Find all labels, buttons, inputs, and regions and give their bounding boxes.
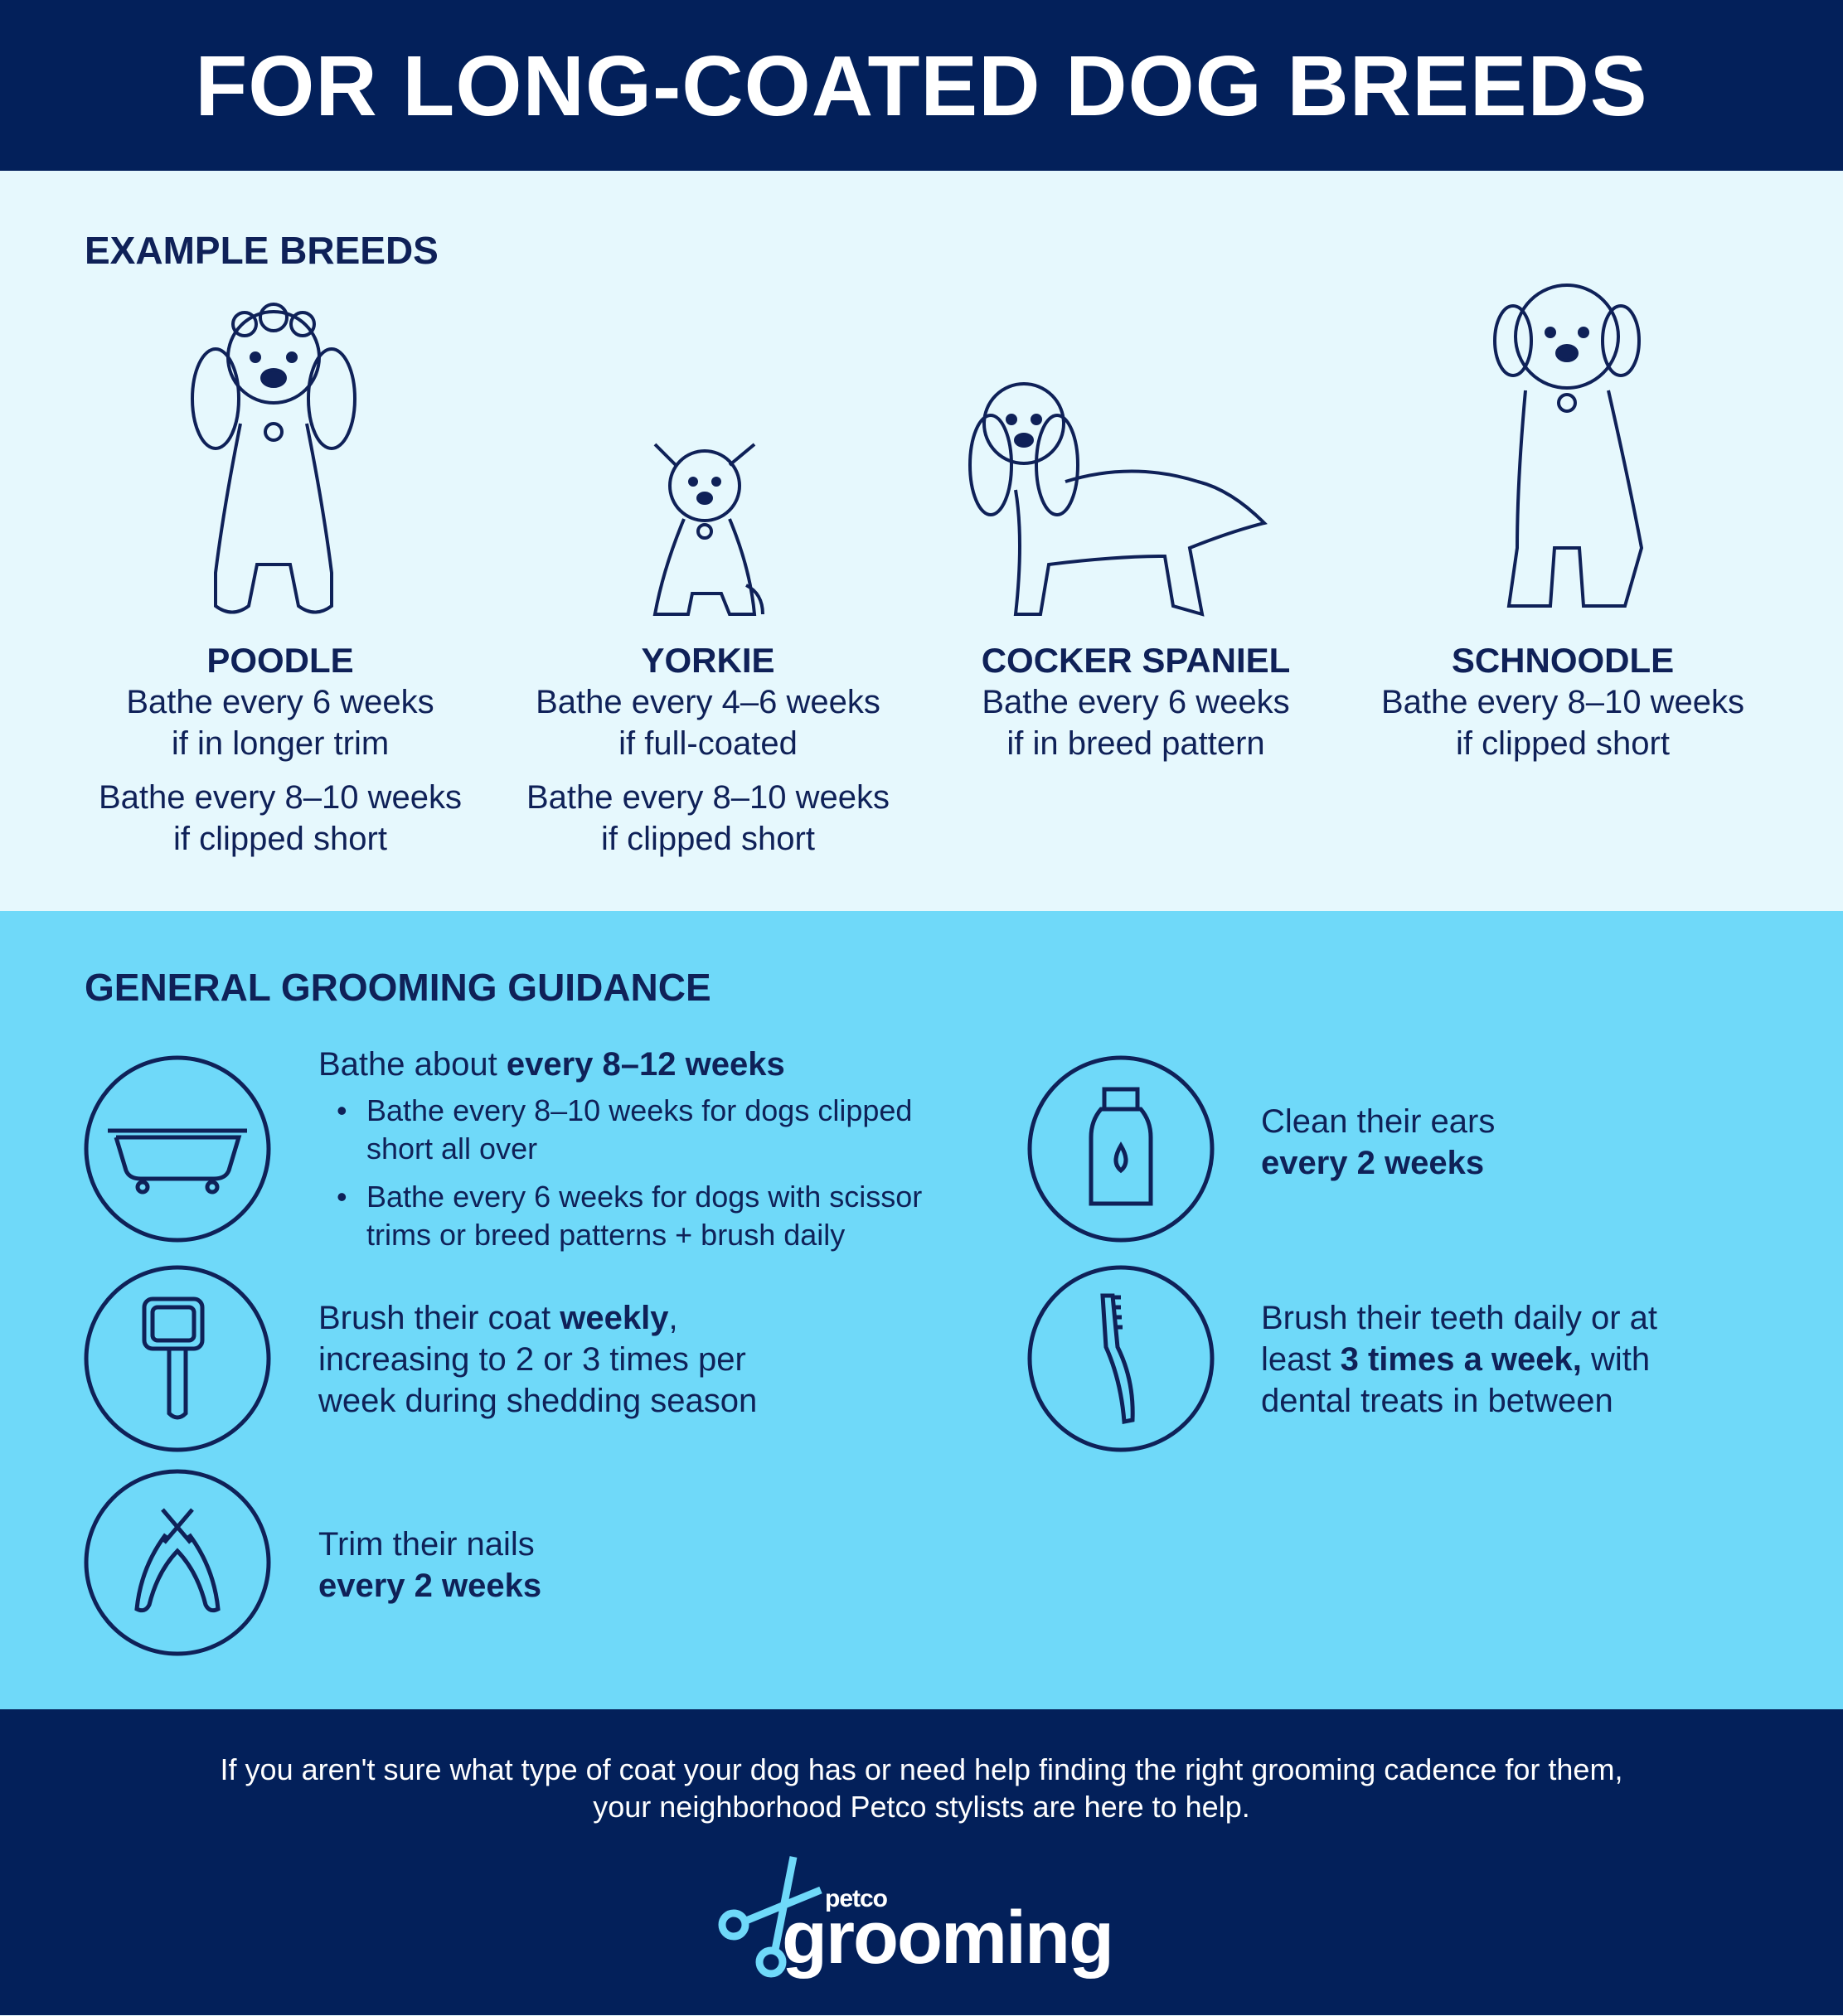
panel: general grooming guidance [0,911,1843,1709]
text: brush coat: increasing to 2 or 3 times per [318,1341,746,1378]
footer text [221,1752,1622,1824]
text: brush coat: Brush their coat weekly, [318,1300,678,1336]
icon: cocker spaniel [968,382,1268,617]
text: ears: Clean their ears [1261,1103,1495,1140]
breed: schnoodle: SCHNOODLE [1452,641,1674,680]
panel: example breeds [0,171,1843,911]
text: teeth [1261,1300,1657,1419]
breed: poodle: if in longer trim [172,725,389,762]
icon: bathtub [85,1056,270,1242]
breed: yorkie: if full-coated [618,725,798,762]
breed: cocker spaniel [982,641,1290,762]
text: brush coat: week during shedding season [318,1383,757,1419]
icon: nail clipper [85,1469,270,1656]
breed: yorkie [526,641,890,857]
breed: poodle: if clipped short [173,821,387,857]
breed: schnoodle: Bathe every 8–10 weeks [1381,684,1744,720]
text: bathe: • [337,1093,347,1127]
text: brush coat [318,1300,757,1419]
icon: toothbrush [1028,1265,1214,1452]
text: teeth: Brush their teeth daily or at [1261,1300,1657,1336]
icon: yorkie [653,443,764,616]
breed: poodle: Bathe every 8–10 weeks [99,779,462,816]
breed: cocker spaniel: if in breed pattern [1006,725,1265,762]
heading: example breeds: EXAMPLE BREEDS [85,229,439,272]
header band [0,0,1843,171]
footer text: If you aren't sure what type of coat your dog has or need help finding the right grooming cadence for them, [221,1752,1622,1786]
breed: schnoodle [1381,641,1744,762]
breed: poodle: POODLE [206,641,354,680]
icon: schnoodle [1493,284,1643,608]
breed: yorkie: YORKIE [641,641,775,680]
breed: cocker spaniel: COCKER SPANIEL [982,641,1290,680]
breed: schnoodle: if clipped short [1456,725,1670,762]
petco word: petco [825,1885,887,1912]
breed: yorkie: if clipped short [601,821,815,857]
text: bathe: Bathe every 6 weeks for dogs with scissor trims or breed patterns + brush daily [366,1180,922,1252]
icon: scissors [718,1856,822,1978]
text: nails: Trim their nails [318,1526,535,1563]
grooming word: grooming [782,1897,1113,1980]
icon: brush [85,1265,270,1452]
breed: poodle [99,641,462,857]
title: FOR LONG-COATED DOG BREEDS [195,38,1648,133]
text: bathe: Bathe every 8–10 weeks for dogs clipped short all over [366,1093,912,1166]
footer band [0,1709,1843,2015]
text: nails: every 2 weeks [318,1568,541,1604]
text: ears [1261,1103,1495,1181]
text: nails [318,1526,541,1604]
text: bathe [318,1046,922,1252]
text: bathe: Bathe about every 8–12 weeks [318,1046,785,1083]
text: bathe: • [337,1180,347,1214]
icon: poodle [191,303,356,613]
text: ears: every 2 weeks [1261,1145,1484,1181]
breed: poodle: Bathe every 6 weeks [126,684,434,720]
breed: cocker spaniel: Bathe every 6 weeks [982,684,1290,720]
breed: yorkie: Bathe every 4–6 weeks [536,684,880,720]
text: teeth: dental treats in between [1261,1383,1613,1419]
logo: petco grooming [718,1856,1113,1980]
footer text: your neighborhood Petco stylists are here to help. [593,1790,1250,1824]
icon: ear cleaner [1028,1056,1214,1242]
text: teeth: least 3 times a week, with [1261,1341,1650,1378]
heading: general grooming guidance: GENERAL GROOMING GUIDANCE [85,966,711,1009]
breed: yorkie: Bathe every 8–10 weeks [526,779,890,816]
